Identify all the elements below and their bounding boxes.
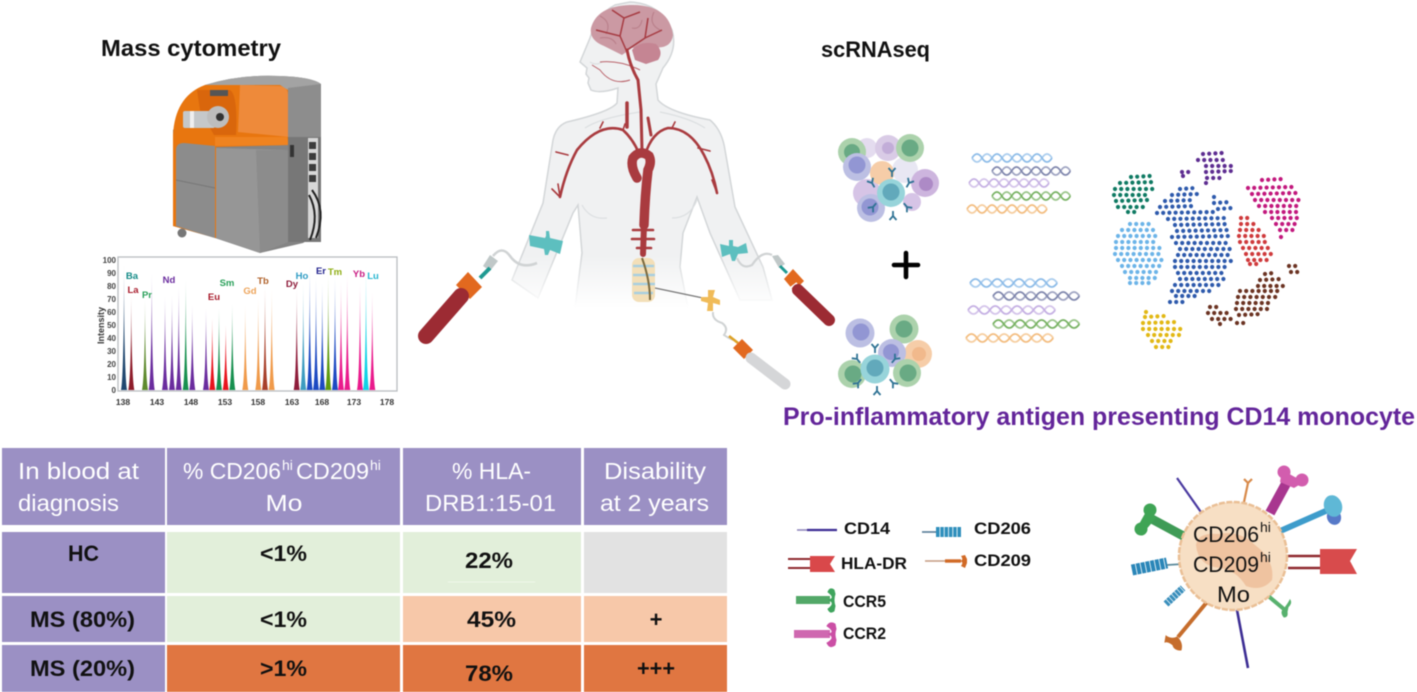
illustration: human body with brain and arteries — [426, 2, 829, 384]
y axis tick labels: 60 — [107, 308, 117, 317]
legend item: CCR5 — [796, 589, 886, 612]
right arm blood tube — [737, 254, 829, 320]
receptor: CCR5 small — [1267, 595, 1291, 617]
y axis tick labels: 70 — [107, 295, 117, 304]
receptor: CD206 small hatch — [1166, 588, 1183, 604]
cell label — [1193, 519, 1271, 607]
element labels: Ba — [126, 271, 139, 282]
body silhouette — [512, 2, 772, 308]
facial arteries — [592, 62, 640, 82]
legend item: CCR5: CCR5 — [843, 592, 886, 611]
chest and face creases — [582, 62, 705, 218]
cluster: blue — [1157, 188, 1232, 302]
element labels: Nd — [163, 275, 176, 286]
element labels: Yb — [353, 269, 365, 280]
element labels: Er — [316, 266, 326, 277]
x axis tick labels — [116, 397, 394, 407]
cell label: hi — [1260, 519, 1271, 535]
table header row: hi — [370, 457, 381, 473]
table header row — [2, 448, 727, 525]
element labels: La — [127, 285, 139, 296]
x axis tick labels: 138 — [116, 397, 130, 407]
table row: MS 20%: +++ — [637, 656, 675, 681]
x axis tick labels: 168 — [315, 397, 329, 407]
element labels: Sm — [220, 278, 234, 289]
cell cluster: top, mixed cells — [838, 134, 939, 222]
legend item: HLA-DR — [788, 554, 907, 573]
legend: receptors — [788, 519, 1031, 647]
heading: pro-inflammatory monocyte: Pro-inflammatory antigen presenting CD14 monocyte — [783, 403, 1415, 431]
cell label: CD206 — [1193, 522, 1259, 547]
table row: MS 20% — [2, 645, 727, 692]
table header row: at 2 years — [600, 490, 709, 516]
lumbar puncture needle and collection tube — [655, 288, 785, 384]
legend item: CD14: CD14 — [844, 519, 891, 538]
x axis tick labels: 143 — [150, 397, 164, 407]
table row: HC: <1% — [260, 541, 307, 566]
cluster: magenta — [1248, 179, 1300, 237]
table header row: CD209 — [296, 458, 369, 484]
legend item: CD209 — [925, 551, 1031, 570]
cluster: light blue — [1115, 224, 1162, 283]
receptor: CCR5 large — [1134, 504, 1187, 538]
table row: MS 80%: 45% — [467, 607, 516, 632]
table header row: hi — [282, 457, 293, 473]
y axis tick labels: 90 — [107, 269, 117, 278]
monocyte with surface receptors — [1132, 466, 1357, 668]
icon: mass cytometer instrument — [173, 76, 321, 253]
receptor: CD206 blue — [1278, 493, 1345, 532]
element labels: Dy — [286, 279, 299, 290]
y axis tick labels: 40 — [107, 334, 117, 343]
legend item: HLA-DR: HLA-DR — [841, 554, 907, 573]
cluster: purple — [1182, 153, 1232, 183]
cluster: yellow — [1143, 312, 1183, 347]
cell nucleus — [1196, 533, 1272, 588]
receptor: CCR2 — [1270, 466, 1308, 513]
brain — [591, 5, 673, 64]
legend item: CD14 — [797, 519, 891, 538]
element labels — [126, 266, 379, 303]
x axis tick labels: 158 — [251, 397, 265, 407]
cell body — [1179, 502, 1287, 610]
table row: MS 20%: MS (20%) — [30, 656, 135, 681]
table row: MS 80% — [2, 596, 727, 642]
y axis tick labels: 80 — [107, 282, 117, 291]
element labels: Lu — [367, 271, 379, 282]
element labels: Pr — [142, 290, 152, 301]
left arm tourniquet — [529, 231, 563, 255]
element labels: Ho — [296, 271, 309, 282]
element labels: Tm — [328, 267, 342, 278]
table row: MS 80%: <1% — [260, 607, 307, 632]
table header row: % CD206 — [183, 458, 281, 484]
arteries — [552, 50, 717, 254]
receptor: HLA-DR — [1288, 549, 1357, 574]
cell label: hi — [1260, 549, 1271, 565]
element labels: Tb — [257, 276, 269, 287]
cell label: Mo — [1217, 582, 1250, 607]
legend item: CD206: CD206 — [974, 519, 1031, 538]
legend item: CD206 — [922, 519, 1031, 538]
table header row: diagnosis — [18, 490, 119, 516]
y axis tick labels: 100 — [103, 256, 117, 265]
y axis tick labels — [103, 256, 117, 395]
table header row: Disability — [604, 458, 707, 484]
cell label: CD209 — [1193, 552, 1259, 577]
y axis tick labels: 0 — [112, 386, 117, 395]
y axis tick labels: 10 — [107, 373, 117, 382]
title: scRNAseq: scRNAseq — [821, 37, 930, 62]
title: Mass cytometry: Mass cytometry — [101, 35, 281, 61]
legend item: CCR2: CCR2 — [843, 624, 886, 643]
y axis tick labels: 50 — [107, 321, 117, 330]
spine — [632, 258, 655, 302]
table header row: In blood at — [18, 458, 140, 484]
cell cluster: bottom, mixed cells — [838, 314, 932, 395]
legend item: CD209: CD209 — [974, 551, 1031, 570]
y axis tick labels: 30 — [107, 347, 117, 356]
cluster: red — [1239, 218, 1273, 264]
right arm tourniquet — [720, 240, 748, 261]
x axis tick labels: 173 — [347, 397, 361, 407]
table row: HC: HC — [68, 541, 99, 566]
x axis tick labels: 178 — [380, 397, 394, 407]
table row: MS 80%: MS (80%) — [30, 607, 135, 632]
table row: HC — [2, 532, 727, 593]
spectrum peaks — [119, 258, 396, 390]
element labels: Gd — [243, 286, 257, 297]
receptor: CD14 top — [1177, 478, 1203, 515]
table row: MS 80%: + — [650, 607, 662, 632]
x axis tick labels: 153 — [218, 397, 232, 407]
legend item: CCR2 — [794, 623, 886, 647]
scatter plot: cell clusters — [1114, 153, 1300, 347]
DNA strands: bottom set — [966, 279, 1079, 342]
left arm blood tube — [426, 250, 537, 336]
chart: mass spectrum intensity — [96, 256, 397, 407]
table header row: % HLA- — [452, 458, 531, 484]
receptor: CD209 lower — [1165, 602, 1207, 650]
receptor: CD206 large hatch — [1132, 563, 1183, 570]
x axis tick labels: 163 — [285, 397, 299, 407]
table header row: DRB1:15-01 — [425, 490, 556, 516]
cluster: teal — [1114, 176, 1155, 212]
table row: MS 20%: 78% — [465, 661, 513, 686]
y axis tick labels: 20 — [107, 360, 117, 369]
table: blood findings at diagnosis — [2, 448, 727, 692]
cluster: brown — [1208, 266, 1299, 324]
table row: MS 20%: >1% — [260, 656, 307, 681]
x axis tick labels: 148 — [184, 397, 198, 407]
table row: HC: 22% — [465, 548, 513, 573]
element labels: Eu — [208, 292, 220, 303]
receptor: CD14 lower — [1237, 610, 1248, 668]
plus sign — [894, 253, 918, 277]
table header row: Mo — [266, 490, 302, 516]
y axis title: Intensity — [96, 307, 106, 344]
DNA strands: top set — [967, 154, 1070, 213]
receptor: CD209 top — [1244, 479, 1252, 502]
